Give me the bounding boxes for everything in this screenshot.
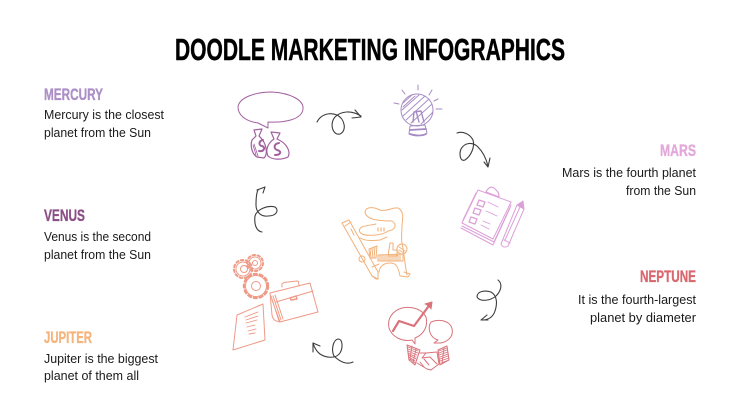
text block: Mars: Mars is the fourth planet [562,165,696,180]
text block: Neptune: It is the fourth-largest [578,292,696,307]
text block: Mars: from the Sun [626,183,696,198]
text block: Mars [562,141,696,198]
title: DOODLE MARKETING INFOGRAPHICS [175,32,565,67]
arrow: top [317,110,361,134]
icon: speech bubble and money bags [238,92,303,159]
icon: chart bubbles and handshake [389,302,452,370]
text block: Venus: planet from the Sun [44,247,151,262]
text block: Venus [44,206,151,262]
text block: Neptune: planet by diameter [590,310,697,325]
icon: character with pencil [342,208,410,279]
icon: gears, briefcase and document [233,255,318,350]
text block: Mercury [44,85,164,140]
text block: Mercury: planet from the Sun [44,125,151,140]
text block: Venus: Venus is the second [44,229,151,244]
arrow: right [477,280,501,320]
text block: Jupiter: JUPITER [44,328,92,347]
text block: Mercury: MERCURY [44,85,103,104]
text block: Jupiter: Jupiter is the biggest [44,351,158,366]
icon: clipboard and pencil [461,187,524,247]
icon: light bulb [394,85,442,136]
arrow: upper right [457,132,490,167]
text block: Mars: MARS [660,141,696,160]
text block: Neptune [578,267,697,325]
arrow: bottom [313,339,353,363]
text block: Venus: VENUS [44,206,85,225]
text block: Neptune: NEPTUNE [640,267,696,286]
text block: Jupiter: planet of them all [44,368,139,383]
text block: Jupiter [44,328,158,383]
text block: Mercury: Mercury is the closest [44,107,164,122]
arrow: left [255,187,277,232]
